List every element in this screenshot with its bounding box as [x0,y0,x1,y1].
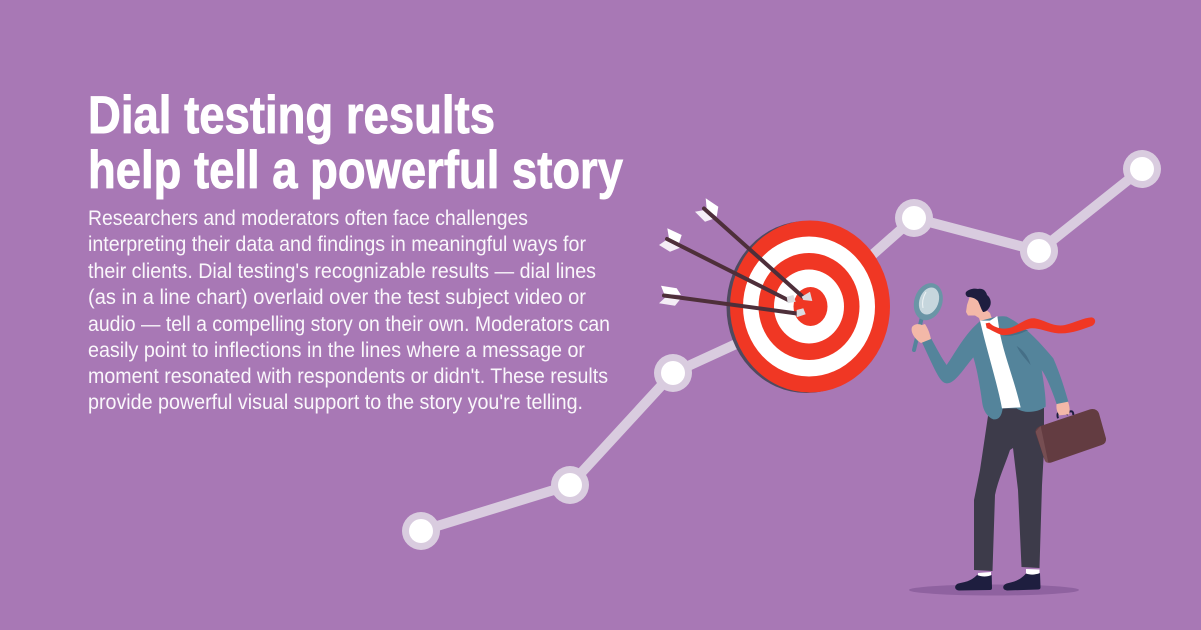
body text block: Researchers and moderators often face challenges [88,206,528,230]
shirt [980,316,1021,408]
title: Dial testing results [88,86,495,145]
arrow: top [695,198,812,301]
body text block: easily point to inflections in the lines where a message or [88,338,585,362]
jacket [922,316,1068,419]
body text block [88,206,610,414]
title: help tell a powerful story [88,141,623,200]
socks [978,569,1040,577]
upper body [922,316,1106,463]
arrows [659,198,812,317]
magnifier [909,279,947,350]
neck and face [966,296,992,324]
body text block: (as in a line chart) overlaid over the test subject video or [88,285,586,309]
line chart [402,150,1161,550]
body text block: their clients. Dial testing's recognizable results — dial lines [88,259,596,283]
briefcase [1036,409,1106,463]
body text block: moment resonated with respondents or didn't. These results [88,364,608,388]
hand left [912,324,931,343]
title [88,86,623,200]
tie [986,317,1095,335]
body text block: interpreting their data and findings in meaningful ways for [88,232,586,256]
body text block: audio — tell a compelling story on their own. Moderators can [88,312,610,336]
person [909,279,1106,596]
ground shadow [909,584,1079,596]
hand right [1056,401,1070,415]
hair [966,289,991,312]
shoes [955,573,1040,590]
trousers [974,408,1044,571]
arrow: middle [659,228,796,303]
target [726,220,890,393]
arrow: bottom [659,286,806,317]
body text block: provide powerful visual support to the story you're telling. [88,390,583,414]
